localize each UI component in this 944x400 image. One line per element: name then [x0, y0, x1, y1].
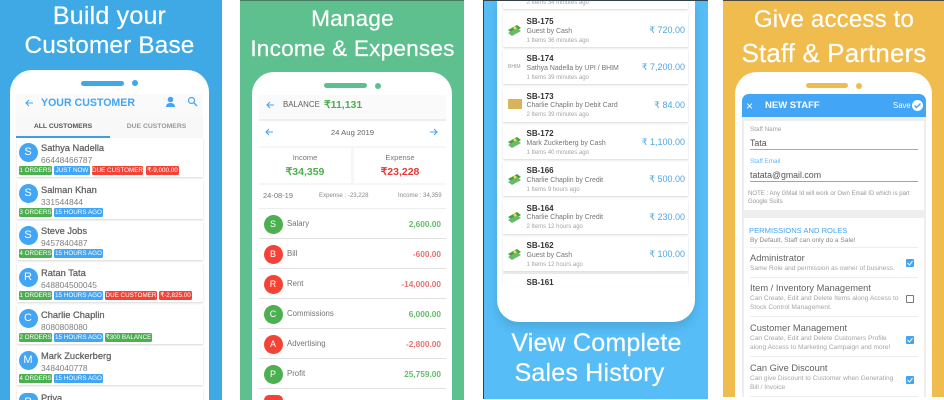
sale: SB-175 — [503, 13, 688, 47]
row: advertising: A — [270, 338, 276, 348]
form card: staff details: Staff Email — [750, 158, 780, 165]
heading: build your customer base: Customer Base — [24, 32, 195, 59]
permission: item inventory management: Stock Control Management. — [750, 304, 832, 311]
sale: SB-164 — [503, 200, 688, 234]
icon: person — [166, 96, 175, 107]
customer card: Steve Jobs: 9457840487 — [41, 238, 88, 248]
expense card: ₹23,228 — [381, 166, 419, 178]
customer card: Ratan Tata: 1 ORDERS — [19, 292, 52, 299]
row: bill: -600.00 — [413, 249, 441, 259]
heading: manage income and expenses — [250, 6, 455, 61]
income card: Income — [293, 153, 317, 162]
permission: can give discount: Can Give Discount — [750, 363, 828, 373]
customer card: Charlie Chaplin: 2 ORDERS — [19, 334, 52, 341]
customer card: Ratan Tata: Ratan Tata — [41, 268, 86, 278]
customer card: Ratan Tata — [17, 263, 203, 302]
sale: SB-166: Charlie Chaplin by Credit — [526, 177, 603, 184]
panel: view complete sales history — [483, 0, 708, 399]
customer card: Charlie Chaplin: ₹300 BALANCE — [106, 334, 151, 341]
customer card: Mark Zuckerberg: Mark Zuckerberg — [41, 351, 111, 361]
form card: permissions and roles: By Default, Staff can only do a Sale! — [750, 237, 855, 244]
expense card: Expense — [385, 153, 415, 162]
sale: SB-164: SB-164 — [526, 204, 554, 213]
sale: SB-161 clipped: SB-161 — [526, 278, 554, 287]
customer card: Salman Khan: Salman Khan — [41, 185, 97, 195]
sale: SB-172: SB-172 — [526, 129, 554, 138]
sale: SB-162: SB-162 — [526, 241, 554, 250]
customer card: Charlie Chaplin: 8080808080 — [41, 322, 88, 332]
row: salary: S — [270, 218, 276, 228]
heading: build your customer base — [24, 2, 195, 59]
sale: SB-175: Guest by Cash — [526, 28, 572, 34]
row: salary: Salary — [287, 219, 309, 228]
sale: SB-172: Mark Zuckerberg by Cash — [526, 140, 606, 146]
row: bill: Bill — [287, 249, 297, 258]
sale: SB-164: 2 Items 12 hours ago — [526, 224, 583, 230]
customer card: Sathya Nadella: ₹-9,000.00 — [147, 167, 178, 174]
daily summary: Expense : -23,228 — [319, 192, 368, 199]
row: bill: B — [270, 248, 276, 258]
app bar: new staff: × — [746, 98, 753, 112]
row: advertising — [259, 328, 446, 359]
customer card: Sathya Nadella: DUE CUSTOMER — [92, 167, 143, 174]
sale: SB-175: ₹ 720.00 — [649, 25, 685, 35]
customer card: Salman Khan: 3 ORDERS — [19, 209, 52, 216]
sale: SB-174: BHIM — [508, 64, 520, 70]
row: rent — [259, 268, 446, 299]
sale: SB-174: 1 Items 39 minutes ago — [526, 75, 589, 81]
customer card: Sathya Nadella: JUST NOW — [56, 167, 88, 174]
customer card: Steve Jobs: Steve Jobs — [41, 226, 87, 236]
sale: SB-172 — [503, 125, 688, 159]
heading: view complete sales history — [511, 329, 682, 387]
permission: customer management: Can Create, Edit and Delete Customers Profile — [750, 335, 887, 342]
row: profit: Profit — [287, 369, 305, 378]
form card: staff details: NOTE : Any GMail Id will work or Own Email ID which is part — [748, 191, 910, 197]
sale: SB-164: ₹ 230.00 — [649, 212, 685, 222]
sale: partial top — [503, 1, 688, 9]
sale: SB-166 — [503, 162, 688, 196]
customer card: Salman Khan: 15 HOURS AGO — [55, 209, 102, 216]
sale: SB-173: 2 Items 39 minutes ago — [526, 112, 589, 118]
customer card: Charlie Chaplin: Charlie Chaplin — [41, 310, 105, 320]
date selector: 24 Aug 2019 — [331, 128, 374, 137]
sale: SB-175: SB-175 — [526, 17, 554, 26]
income card: ₹34,359 — [286, 166, 324, 178]
panel: build your customer base — [0, 0, 222, 400]
tabs: ALL CUSTOMERS — [34, 123, 92, 130]
customer card: Charlie Chaplin: C — [24, 312, 32, 324]
title: your customer: YOUR CUSTOMER — [41, 97, 135, 109]
daily summary — [259, 185, 446, 209]
customer card: Ratan Tata: 15 HOURS AGO — [55, 292, 102, 299]
customer card: Charlie Chaplin: 15 HOURS AGO — [55, 334, 102, 341]
permission: item inventory management: Can Create, Edit and Delete Items along Access to — [750, 295, 898, 302]
customer card: Steve Jobs: 15 HOURS AGO — [55, 250, 102, 257]
permission: administrator: Same Role and permission as owner of business. — [750, 264, 895, 272]
app bar: new staff: NEW STAFF — [765, 100, 820, 110]
heading: build your customer base: Build your — [53, 2, 166, 30]
sale: SB-173 — [503, 88, 688, 122]
row: rent: R — [270, 278, 276, 288]
sale: SB-174: ₹ 7,200.00 — [642, 62, 685, 72]
sale: SB-175: 1 Items 36 minutes ago — [526, 38, 589, 44]
heading: manage income and expenses: Income & Expenses — [250, 36, 455, 61]
form card: permissions and roles — [744, 218, 924, 397]
balance header: BALANCE — [283, 100, 320, 108]
form card: staff details: tatata@gmail.com — [750, 170, 821, 180]
customer card: Ratan Tata: DUE CUSTOMER — [106, 292, 156, 299]
sale: SB-162: 1 Items 12 hours ago — [526, 262, 583, 268]
form card: staff details — [744, 121, 924, 210]
row: commissions — [259, 298, 446, 329]
row: profit — [259, 358, 446, 389]
icon: back arrow — [25, 100, 33, 106]
sale: SB-164: Charlie Chaplin by Credit — [526, 214, 603, 221]
customer card: Priya — [17, 388, 203, 400]
row: profit: 25,759.00 — [404, 369, 441, 379]
sale: SB-166: ₹ 500.00 — [649, 174, 685, 184]
customer card: Charlie Chaplin — [17, 305, 203, 344]
permission: customer management: Customer Management — [750, 323, 847, 333]
customer card: Ratan Tata: R — [24, 270, 32, 282]
sale: SB-174: SB-174 — [526, 54, 554, 63]
customer card: Mark Zuckerberg: 4 ORDERS — [19, 375, 52, 382]
phone: sales list — [497, 1, 695, 322]
sale: SB-166: 1 Items 9 hours ago — [526, 187, 580, 193]
row: commissions: 6,000.00 — [409, 309, 441, 319]
row: salary: 2,600.00 — [409, 219, 441, 229]
form card: staff details: Google Suits — [748, 199, 783, 205]
customer card: Sathya Nadella: 66448466787 — [41, 155, 92, 165]
sale: SB-172: 1 Items 40 minutes ago — [526, 150, 589, 156]
customer card: Mark Zuckerberg: 3484040778 — [41, 363, 88, 373]
tabs — [16, 116, 203, 138]
row: rent: -14,000.00 — [401, 279, 441, 289]
heading: give access to staff and partners — [742, 6, 926, 68]
sale: SB-162: Guest by Cash — [526, 252, 572, 258]
customer card: Salman Khan — [17, 180, 203, 219]
customer card: Ratan Tata: 648804500045 — [41, 280, 97, 290]
permission: can give discount — [750, 363, 914, 391]
permission: administrator — [750, 253, 914, 272]
date selector — [265, 128, 438, 137]
customer card: Sathya Nadella: S — [24, 146, 32, 158]
permission: item inventory management: Item / Inventory Management — [750, 283, 871, 293]
sale: SB-173: SB-173 — [526, 92, 554, 101]
customer card: Steve Jobs: 4 ORDERS — [19, 250, 52, 257]
row: rent: Rent — [287, 279, 303, 288]
customer card: Sathya Nadella — [17, 138, 203, 177]
row: profit: P — [270, 368, 276, 378]
app bar: new staff: Save — [893, 100, 911, 110]
panel: manage income and expenses — [240, 0, 464, 400]
balance header: ₹11,131 — [324, 98, 362, 110]
daily summary: 24-08-19 — [263, 191, 293, 200]
form card: permissions and roles: PERMISSIONS AND ROLES — [749, 226, 847, 235]
customer card: Steve Jobs — [17, 221, 203, 260]
panel: give access to staff and partners — [723, 0, 944, 397]
row: bill — [259, 238, 446, 269]
customer card: Ratan Tata: ₹-2,825.00 — [160, 292, 191, 299]
permission: customer management: along Access to Marketing Campaign and more! — [750, 344, 890, 351]
permission: can give discount: Can give Discount to Customer when Generating — [750, 375, 893, 382]
expense card — [354, 148, 446, 183]
income card — [259, 148, 351, 183]
form card: staff details: Staff Name — [750, 126, 781, 133]
balance header — [259, 95, 446, 121]
phone: new staff form — [735, 72, 932, 397]
customer card: Salman Khan: S — [24, 187, 32, 199]
app bar: new staff — [742, 94, 926, 117]
heading: view complete sales history: View Complete — [511, 329, 682, 357]
customer card: Steve Jobs: S — [24, 229, 32, 241]
sale: SB-166: SB-166 — [526, 166, 554, 175]
permission: administrator: Administrator — [750, 253, 805, 263]
form card: staff details: Tata — [750, 138, 767, 148]
row: advertising: -2,800.00 — [406, 339, 441, 349]
phone: balance screen — [252, 72, 452, 400]
tabs: DUE CUSTOMERS — [127, 123, 186, 130]
heading: view complete sales history: Sales History — [515, 359, 664, 387]
row: salary — [259, 208, 446, 239]
customer card: Sathya Nadella: 1 ORDERS — [19, 167, 52, 174]
icon: search — [188, 96, 198, 106]
sale: SB-174: Sathya Nadella by UPI / BHIM — [526, 65, 619, 72]
permission: can give discount: Bill / Invoice — [750, 384, 785, 391]
customer card: Sathya Nadella: Sathya Nadella — [41, 143, 104, 153]
phone: customer list — [10, 70, 209, 400]
row: commissions: Commissions — [287, 309, 334, 318]
permission: item inventory management — [750, 283, 914, 311]
sale: SB-172: ₹ 1,100.00 — [642, 137, 685, 147]
sale: SB-173: Charlie Chaplin by Debit Card — [526, 102, 618, 109]
row: partial — [264, 395, 283, 400]
customer card: Mark Zuckerberg: M — [23, 354, 33, 366]
customer card: Salman Khan: 331544844 — [41, 197, 83, 207]
sale: SB-161 clipped — [503, 274, 688, 287]
customer card: Mark Zuckerberg: 15 HOURS AGO — [55, 375, 102, 382]
row: advertising: Advertising — [287, 339, 326, 348]
sale: SB-162 — [503, 237, 688, 271]
permission: customer management — [750, 323, 914, 351]
sale: SB-162: ₹ 100.00 — [649, 249, 685, 259]
heading: give access to staff and partners: Give access to — [754, 6, 914, 33]
sale: SB-173: ₹ 84.00 — [654, 100, 685, 110]
daily summary: Income : 34,359 — [398, 192, 442, 199]
heading: manage income and expenses: Manage — [311, 6, 394, 31]
customer card: Mark Zuckerberg — [17, 346, 203, 385]
sale: SB-174 — [503, 50, 688, 84]
heading: give access to staff and partners: Staff & Partners — [742, 40, 926, 68]
row: commissions: C — [270, 308, 276, 318]
